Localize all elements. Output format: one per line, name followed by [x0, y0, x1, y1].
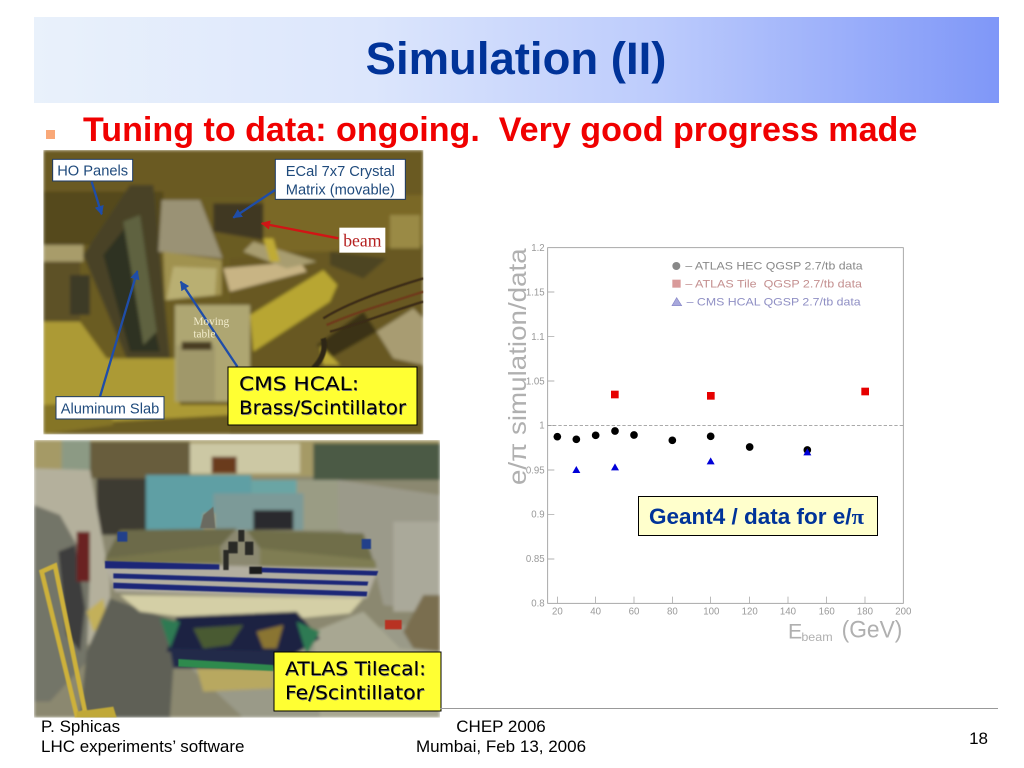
label: beam — [339, 228, 385, 253]
label: Aluminum Slab — [56, 397, 164, 419]
data: ATLAS Tile red squares — [611, 388, 869, 400]
x axis tick labels: 20 — [552, 606, 563, 617]
y axis tick labels: 0.95 — [526, 465, 545, 476]
photo panel: CMS HCAL test beam — [43, 150, 423, 434]
y axis tick labels: 0.85 — [526, 554, 545, 565]
header banner — [34, 17, 999, 103]
x axis tick labels: 100 — [703, 606, 719, 617]
footer: author: LHC experiments’ software — [41, 737, 244, 756]
label: HO Panels: HO Panels — [57, 164, 128, 180]
callout: ATLAS Tilecal: ATLAS Tilecal: — [285, 658, 426, 680]
label: Moving table — [193, 316, 230, 341]
callout: CMS HCAL: Brass/Scintillator — [239, 397, 406, 419]
x axis tick labels: 140 — [780, 606, 796, 617]
arrow: HO Panels — [92, 182, 102, 214]
callout: Geant4 / data for e/pi: Geant4 / data for e/π — [649, 504, 865, 529]
chart frame — [548, 248, 903, 603]
arrow: moving table — [181, 282, 237, 367]
legend: – CMS HCAL QGSP 2.7/tb data — [687, 297, 861, 309]
detector stripes — [105, 561, 219, 570]
legend — [672, 261, 863, 309]
label: ECal crystal matrix: ECal 7x7 Crystal — [286, 164, 395, 180]
callout: ATLAS Tilecal: Fe/Scintillator — [285, 682, 424, 704]
x axis title — [788, 617, 902, 644]
chart: e/pi simulation over data — [505, 243, 911, 644]
callout: ATLAS Tilecal: ATLAS Tilecal: — [286, 659, 427, 681]
callout: ATLAS Tilecal: Fe/Scintillator — [286, 683, 425, 705]
label: Moving table: table — [193, 329, 215, 341]
arrow: aluminum slab — [100, 271, 137, 397]
label: HO Panels — [53, 159, 133, 181]
x axis tick labels: 60 — [629, 606, 639, 617]
y axis tick labels: 0.8 — [531, 599, 545, 610]
callout: CMS HCAL: CMS HCAL: — [240, 374, 360, 396]
bullet icon — [46, 130, 55, 139]
reference line at 1 — [548, 425, 903, 427]
footer: page number: 18 — [969, 729, 988, 748]
footer rule — [440, 708, 998, 710]
y axis title: e/π simulation/data — [505, 248, 532, 485]
photo panel: ATLAS Tilecal — [34, 440, 440, 718]
x axis title: (GeV) — [842, 617, 902, 644]
bullet heading: Tuning to data: ongoing. Very good progress made — [83, 111, 917, 149]
x axis title: beam — [801, 631, 833, 644]
label: beam: beam — [343, 230, 382, 250]
x axis tick labels: 180 — [857, 606, 873, 617]
callout: Geant4 / data for e/pi — [638, 496, 878, 536]
label: ECal crystal matrix — [275, 159, 405, 199]
y axis tick labels: 1.2 — [531, 243, 545, 254]
data: ATLAS HEC black circles — [553, 427, 811, 454]
footer: author: P. Sphicas — [41, 717, 120, 736]
arrow: beam — [262, 223, 338, 238]
label: ECal crystal matrix: Matrix (movable) — [286, 182, 395, 198]
x axis tick labels — [552, 606, 911, 617]
y axis tick labels: 1 — [539, 421, 545, 432]
label: Moving table: Moving — [193, 316, 230, 328]
x axis title: E — [788, 619, 802, 643]
x axis tick labels: 40 — [590, 606, 601, 617]
x axis tick labels: 200 — [895, 606, 911, 617]
arrow: ECal — [233, 190, 275, 218]
legend: – ATLAS Tile QGSP 2.7/tb data — [685, 279, 862, 291]
y axis tick labels — [526, 243, 545, 610]
label: Aluminum Slab: Aluminum Slab — [61, 402, 159, 418]
y axis tick labels: 1.15 — [526, 287, 545, 298]
callout: ATLAS Tilecal — [274, 652, 441, 711]
footer: author — [41, 717, 244, 756]
title: Simulation (II) — [366, 33, 666, 84]
footer: conference: Mumbai, Feb 13, 2006 — [416, 737, 586, 756]
callout: CMS HCAL — [228, 367, 417, 425]
x axis tick labels: 160 — [819, 606, 835, 617]
legend: – ATLAS HEC QGSP 2.7/tb data — [685, 261, 863, 273]
footer: conference: CHEP 2006 — [456, 717, 546, 736]
x axis tick labels: 80 — [667, 606, 678, 617]
y axis tick labels: 1.05 — [526, 376, 545, 387]
callout: CMS HCAL: Brass/Scintillator — [240, 398, 407, 420]
data: CMS HCAL blue triangles — [572, 448, 811, 473]
cables — [313, 278, 423, 368]
y axis tick labels: 0.9 — [531, 510, 545, 521]
x axis tick labels: 120 — [742, 606, 758, 617]
y axis tick labels: 1.1 — [531, 332, 545, 343]
footer: conference — [416, 717, 586, 756]
callout: CMS HCAL: CMS HCAL: — [239, 373, 359, 395]
